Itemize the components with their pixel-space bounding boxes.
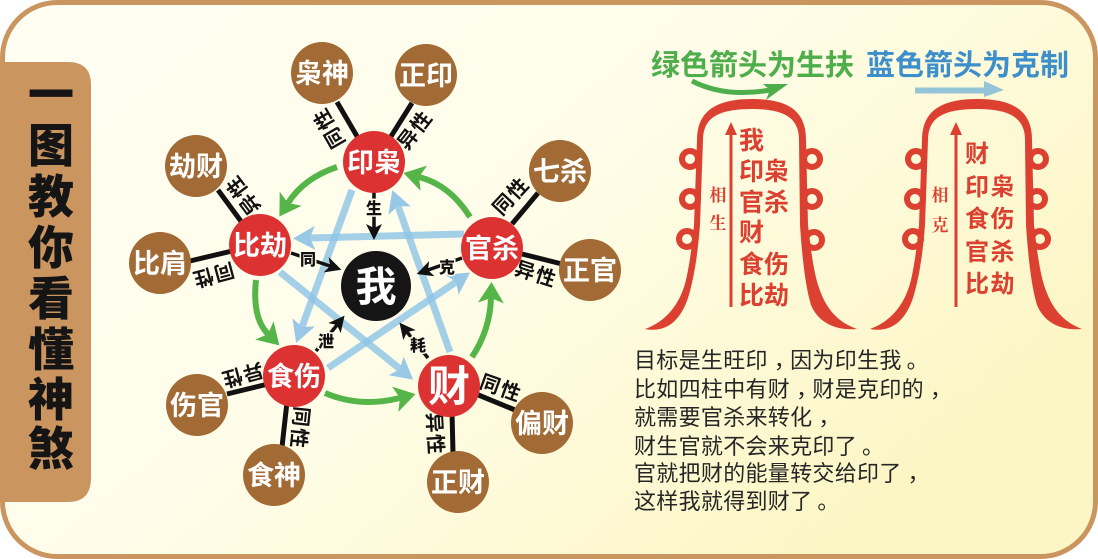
title tab: 神 xyxy=(28,374,74,426)
relation labels: 异性 xyxy=(422,412,447,456)
title tab xyxy=(0,62,91,502)
relation labels: 异性 xyxy=(218,358,266,391)
explanation text: 就需要官杀来转化 ， xyxy=(634,405,841,430)
relation labels: 同性 xyxy=(189,258,237,291)
bell: controlling cycle: 印枭 xyxy=(965,174,1016,201)
bell: controlling cycle: 克 xyxy=(932,211,948,236)
brown ten gods nodes: 劫财 xyxy=(169,152,223,182)
relation labels: 异性 xyxy=(221,171,266,219)
bell: generating cycle: 官杀 xyxy=(739,189,789,217)
title tab: 教 xyxy=(28,171,74,223)
explanation text xyxy=(634,348,952,514)
red element nodes: 官杀 xyxy=(465,234,519,264)
bell: generating cycle: 食伤 xyxy=(739,250,789,279)
brown ten gods nodes: 伤官 xyxy=(170,391,224,421)
relation labels: 同性 xyxy=(286,405,313,451)
red element nodes: 财 xyxy=(428,363,470,410)
centre node: self: 我 xyxy=(356,264,396,310)
brown ten gods nodes xyxy=(129,42,621,513)
relation labels: 异性 xyxy=(512,257,560,292)
explanation text: 比如四柱中有财 ，财是克印的 ， xyxy=(634,377,952,402)
title tab: 你 xyxy=(28,222,74,274)
brown ten gods nodes: 偏财 xyxy=(515,409,569,439)
bell: generating cycle: 生 xyxy=(710,209,726,234)
red element nodes: 食伤 xyxy=(267,362,321,392)
red element nodes: 印枭 xyxy=(347,148,401,178)
title tab: 煞 xyxy=(28,423,74,475)
brown ten gods nodes: 正财 xyxy=(431,468,485,498)
bell: generating cycle: 比劫 xyxy=(739,282,789,310)
bell: controlling cycle: 相 xyxy=(932,181,948,206)
red element nodes: 比劫 xyxy=(233,231,287,261)
bell: generating cycle: 相 xyxy=(710,181,726,206)
brown ten gods nodes: 食神 xyxy=(247,461,301,491)
blue legend arrow xyxy=(915,81,1004,97)
bell: generating cycle: 我 xyxy=(739,127,764,155)
brown ten gods nodes: 枭神 xyxy=(295,59,349,89)
explanation text: 财生官就不会来克印了。 xyxy=(634,434,884,459)
title tab: 图 xyxy=(28,120,74,172)
arrow labels: 克 xyxy=(439,258,455,277)
brown ten gods nodes: 正官 xyxy=(563,256,617,286)
relation labels: 同性 xyxy=(309,103,350,152)
arrow labels: 泄 xyxy=(318,333,334,351)
bell: generating cycle: 财 xyxy=(739,219,764,247)
bell: controlling cycle: 财 xyxy=(965,141,989,168)
blue control arrows star xyxy=(280,190,464,369)
bell: generating cycle xyxy=(645,99,857,330)
bell: controlling cycle: 比劫 xyxy=(965,271,1016,298)
black arrows to centre xyxy=(291,192,462,358)
legend heading: blue: 蓝色箭头为克制 xyxy=(866,49,1069,82)
relation labels: 同性 xyxy=(488,173,534,220)
brown ten gods nodes: 比肩 xyxy=(133,249,187,279)
bell: controlling cycle xyxy=(870,99,1082,330)
ten gods connector lines xyxy=(190,102,562,453)
title tab: 看 xyxy=(28,273,74,325)
relation labels: 异性 xyxy=(393,106,438,154)
title tab: 懂 xyxy=(28,324,74,376)
arrow labels: 耗 xyxy=(410,336,426,355)
centre node: self xyxy=(341,251,411,321)
relation labels: 同性 xyxy=(477,370,525,407)
explanation text: 这样我就得到财了。 xyxy=(634,489,840,514)
arrow labels: 生 xyxy=(366,199,382,218)
arrow labels: 同 xyxy=(300,251,316,269)
explanation text: 目标是生旺印 ，因为印生我。 xyxy=(634,348,929,373)
red element nodes xyxy=(229,131,523,417)
bell: generating cycle: 印枭 xyxy=(739,158,789,186)
green support arrows ring xyxy=(255,167,491,402)
title tab: 一 xyxy=(28,69,74,121)
bell: controlling cycle: 食伤 xyxy=(965,205,1016,233)
brown ten gods nodes: 七杀 xyxy=(533,157,587,187)
green legend arrow xyxy=(692,81,788,100)
relation labels xyxy=(189,103,560,456)
arrow labels xyxy=(300,199,455,355)
explanation text: 官就把财的能量转交给印了 ， xyxy=(634,461,930,486)
brown ten gods nodes: 正印 xyxy=(399,61,453,91)
bell: controlling cycle: 官杀 xyxy=(965,239,1016,266)
legend heading: green: 绿色箭头为生扶 xyxy=(651,49,854,82)
